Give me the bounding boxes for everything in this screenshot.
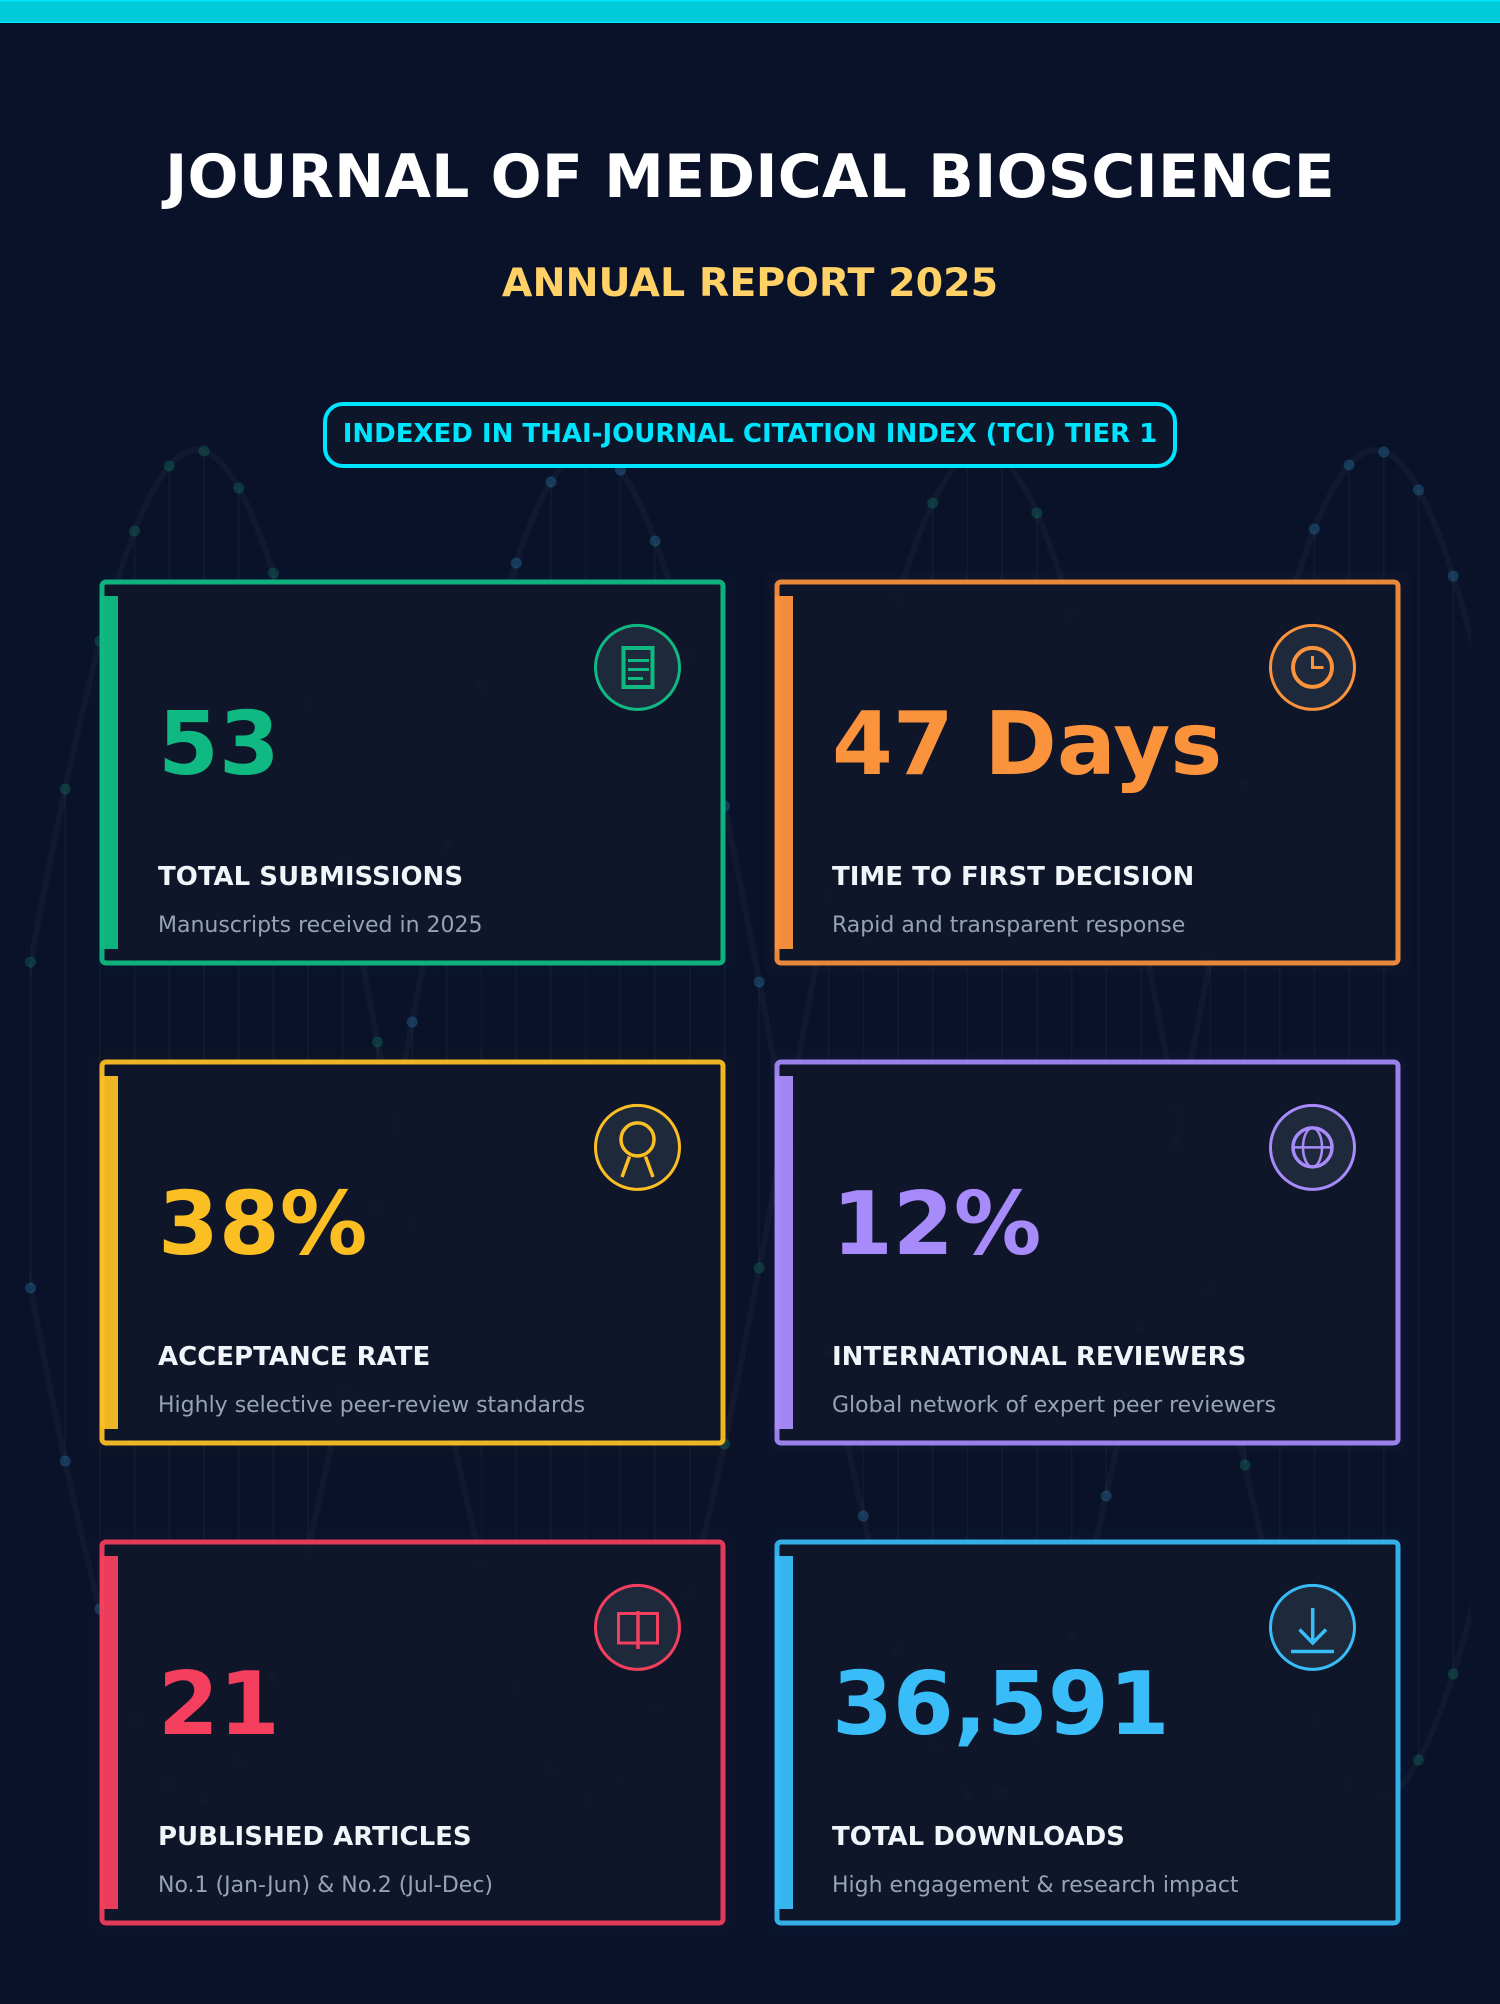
label: published articles: PUBLISHED ARTICLES: [158, 1822, 472, 1852]
description: Global network of expert peer reviewers: [832, 1393, 1276, 1418]
value: 21: 21: [158, 1653, 280, 1755]
label: acceptance rate: ACCEPTANCE RATE: [158, 1342, 430, 1372]
description: Rapid and transparent response: [832, 913, 1185, 938]
panel: time to first decision: [765, 570, 1410, 975]
title: JOURNAL OF MEDICAL BIOSCIENCE: [161, 142, 1335, 212]
value: 47 days: 47 Days: [832, 693, 1222, 795]
value: 53: 53: [158, 693, 280, 795]
badge: TCI tier 1: INDEXED IN THAI-JOURNAL CITATION INDEX (TCI) TIER 1: [343, 419, 1157, 449]
icon: download: [1270, 1585, 1354, 1669]
icon: award: [596, 1105, 680, 1189]
top accent bar: [0, 0, 1500, 23]
panel: total downloads: [765, 1530, 1410, 1935]
description: No.1 (Jan-Jun) & No.2 (Jul-Dec): [158, 1873, 493, 1898]
description: High engagement & research impact: [832, 1873, 1239, 1898]
icon: clock: [1270, 625, 1354, 709]
label: international reviewers: INTERNATIONAL REVIEWERS: [832, 1342, 1246, 1372]
value: 38%: 38%: [158, 1173, 367, 1275]
badge: TCI tier 1: [325, 404, 1175, 466]
value: 36,591: 36,591: [832, 1653, 1170, 1755]
description: Manuscripts received in 2025: [158, 913, 482, 938]
panel: acceptance rate: [90, 1050, 735, 1455]
icon: open book: [596, 1585, 680, 1669]
panel: total submissions: [90, 570, 735, 975]
label: time to first decision: TIME TO FIRST DECISION: [832, 862, 1194, 892]
label: total submissions: TOTAL SUBMISSIONS: [158, 862, 463, 892]
description: Highly selective peer-review standards: [158, 1393, 585, 1418]
background: DNA helix: [0, 445, 1500, 1805]
value: 12%: 12%: [832, 1173, 1041, 1275]
subtitle: ANNUAL REPORT 2025: [502, 260, 998, 306]
panel: international reviewers: [765, 1050, 1410, 1455]
icon: globe: [1270, 1105, 1354, 1189]
panel: published articles: [90, 1530, 735, 1935]
label: total downloads: TOTAL DOWNLOADS: [832, 1822, 1125, 1852]
icon: document: [596, 625, 680, 709]
